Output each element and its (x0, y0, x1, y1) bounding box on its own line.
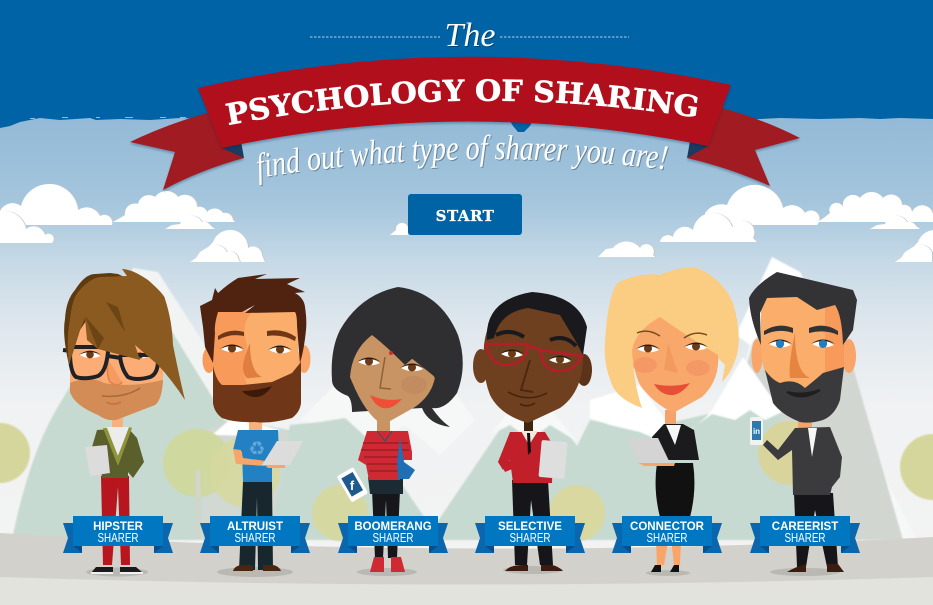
character: careerist: in (753, 427, 760, 436)
character: selective (473, 292, 592, 574)
name banner: hipster (63, 516, 173, 553)
name banner: boomerang: SHARER (372, 531, 414, 545)
sky background (0, 100, 933, 550)
mountains (12, 257, 917, 540)
name banner: boomerang: BOOMERANG (354, 521, 432, 533)
start button (408, 194, 522, 235)
heading: The: The (444, 17, 496, 54)
name banner: connector: CONNECTOR (630, 521, 705, 533)
red ribbon banner (130, 56, 800, 192)
character: hipster (63, 269, 185, 576)
name banner: careerist (750, 516, 860, 553)
ground (0, 533, 933, 605)
name banner: selective: SELECTIVE (498, 521, 562, 533)
ground foreground strip (0, 577, 933, 605)
top blue painted band (0, 0, 933, 132)
ribbon main (198, 57, 731, 148)
name banner: connector: SHARER (646, 531, 688, 545)
name banner: selective (475, 516, 585, 553)
character: boomerang: f (350, 478, 355, 493)
trees (0, 421, 933, 541)
name banner: hipster: HIPSTER (93, 521, 144, 533)
character: altruist (200, 274, 310, 577)
character: boomerang (332, 287, 463, 576)
name banner: careerist: CAREERIST (772, 521, 838, 533)
name banner: selective: SHARER (510, 531, 550, 545)
ribbon folds (222, 141, 244, 158)
ribbon tails (130, 113, 244, 190)
character: connector (605, 268, 739, 576)
start button: START (436, 207, 495, 225)
name banner: altruist (200, 516, 310, 553)
character: careerist (749, 272, 857, 576)
name banner: connector (612, 516, 722, 553)
name banner: altruist: ALTRUIST (227, 521, 283, 533)
character: altruist: ♻ (248, 438, 266, 460)
dotted rule left and right (310, 36, 629, 38)
name banner: boomerang (338, 516, 448, 553)
subtitle: find out what type of sharer you are! (256, 134, 669, 186)
name banner: hipster: SHARER (98, 531, 138, 545)
name banner: altruist: SHARER (234, 531, 276, 545)
title text: PSYCHOLOGY OF SHARING (225, 78, 698, 126)
clouds (0, 184, 933, 262)
name banner: careerist: SHARER (784, 531, 826, 545)
